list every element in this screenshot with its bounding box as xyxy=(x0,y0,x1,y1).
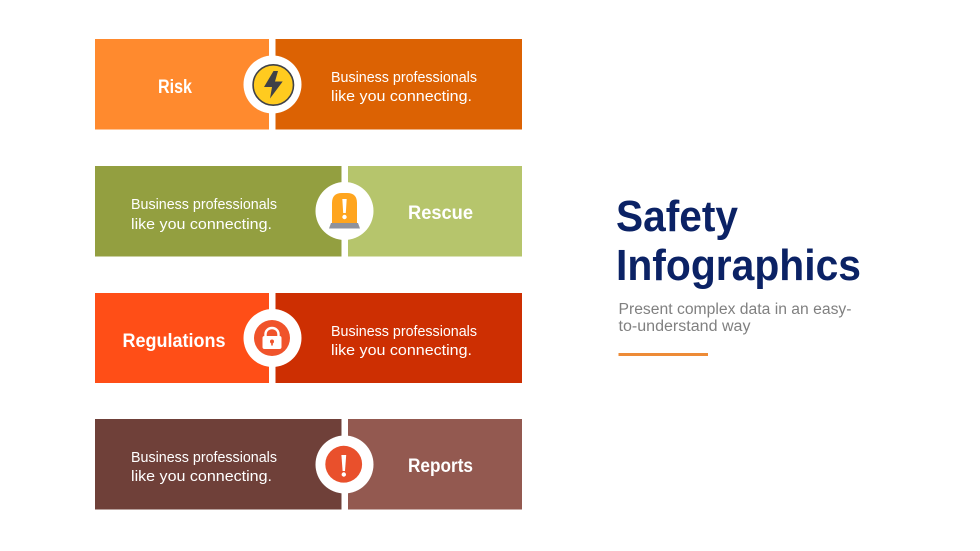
regulations text: Business professionals xyxy=(331,323,477,340)
icon: padlock xyxy=(244,309,302,367)
regulations text: like you connecting. xyxy=(331,342,472,359)
panel: rescue xyxy=(95,166,522,256)
subtitle: Present complex data in an easy- xyxy=(618,301,852,318)
reports description block xyxy=(95,419,342,510)
reports text: like you connecting. xyxy=(131,468,272,485)
accent line xyxy=(618,353,708,356)
title: Safety xyxy=(616,192,738,241)
icon: alarm beacon xyxy=(316,182,374,240)
risk text: Business professionals xyxy=(331,69,477,86)
panel: risk xyxy=(95,39,522,130)
rescue text: like you connecting. xyxy=(131,216,272,233)
icon: warning exclamation xyxy=(316,436,374,494)
rescue text: Business professionals xyxy=(131,196,277,213)
risk text xyxy=(331,69,477,105)
subtitle xyxy=(618,301,852,335)
rescue description block xyxy=(95,166,342,256)
rescue label block xyxy=(348,166,522,256)
subtitle: to-understand way xyxy=(618,318,751,335)
risk description block xyxy=(276,39,522,130)
regulations label block xyxy=(95,293,269,383)
risk label block xyxy=(95,39,269,130)
icon: lightning bolt xyxy=(244,56,302,114)
regulations description block xyxy=(276,293,522,383)
rescue text xyxy=(131,196,277,233)
reports text: Business professionals xyxy=(131,449,277,466)
reports label block xyxy=(348,419,522,510)
panel: reports xyxy=(95,419,522,510)
title: Infographics xyxy=(616,241,861,290)
regulations text xyxy=(331,323,477,359)
risk text: like you connecting. xyxy=(331,88,472,105)
title xyxy=(616,192,861,290)
reports text xyxy=(131,449,277,485)
rescue heading: Rescue xyxy=(408,203,473,224)
regulations heading: Regulations xyxy=(122,331,226,352)
panel: regulations xyxy=(95,293,522,383)
risk heading: Risk xyxy=(158,77,192,98)
reports heading: Reports xyxy=(408,456,473,477)
